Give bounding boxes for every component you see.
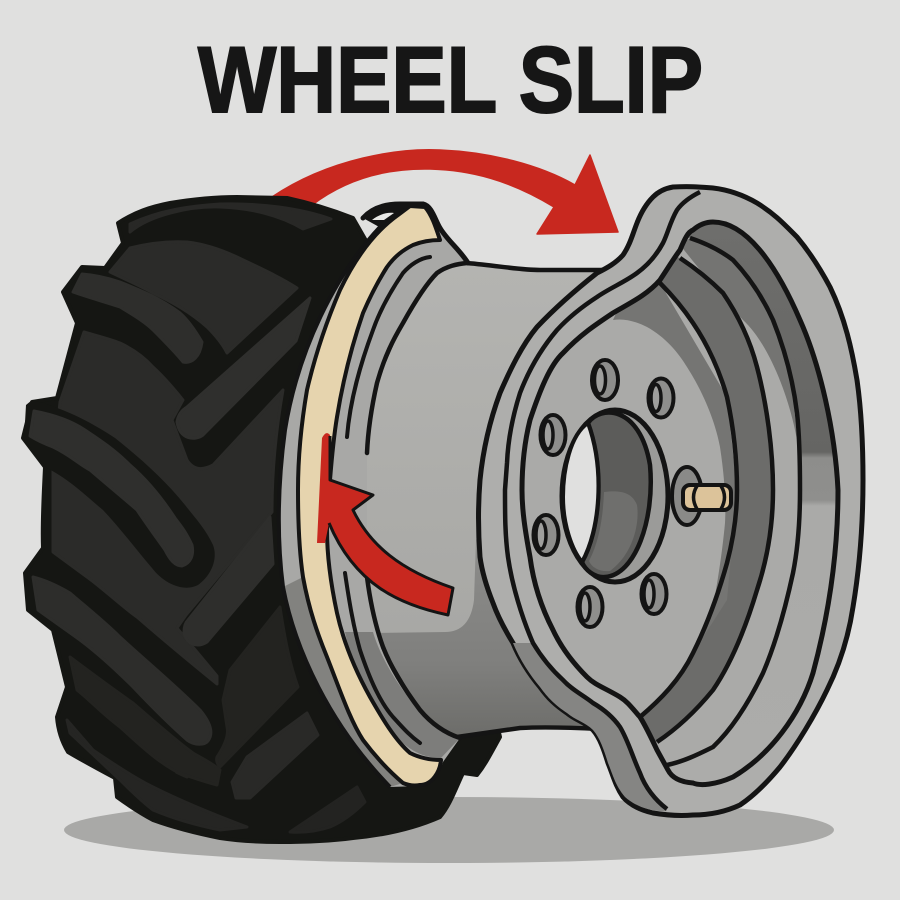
top shoulder lug xyxy=(130,204,331,232)
barrel edge lines xyxy=(367,263,467,738)
upper-left lug xyxy=(73,274,202,362)
outer rim silhouette xyxy=(478,187,863,815)
lower lip shade xyxy=(513,643,667,811)
outer wheel disc xyxy=(478,187,863,815)
well base xyxy=(522,222,838,785)
stud hole 6 xyxy=(642,574,666,614)
upper panel xyxy=(110,242,297,353)
outer band shade xyxy=(283,577,403,787)
sidewall lug xyxy=(232,713,318,798)
bore opening xyxy=(563,423,598,562)
valve base xyxy=(672,467,702,525)
arrow: top rotation xyxy=(272,150,618,234)
tread panels xyxy=(24,204,365,832)
inner lip outline xyxy=(522,222,838,785)
flange top cap xyxy=(363,204,414,228)
stud hole 3 xyxy=(540,415,566,455)
flange sliver highlight xyxy=(372,213,394,220)
disc face xyxy=(524,291,734,714)
tire xyxy=(23,197,500,842)
valve body xyxy=(683,485,731,510)
upper diagonal lug xyxy=(177,298,310,438)
arrow: rim slip xyxy=(317,433,453,615)
flange grooves xyxy=(345,257,430,743)
ring two fill xyxy=(643,257,771,742)
mid-left lug shadow xyxy=(24,400,215,588)
ring one fill xyxy=(678,238,798,504)
cream bead band xyxy=(298,206,441,786)
middle panel xyxy=(53,332,283,684)
mid-left lug xyxy=(30,411,193,566)
center bore xyxy=(562,410,668,582)
bottom tread strip xyxy=(67,720,247,830)
valve stem xyxy=(672,467,731,525)
barrel highlight xyxy=(360,263,625,633)
flange outer outline xyxy=(279,227,390,787)
lower-left lug xyxy=(33,577,211,744)
inner band shade xyxy=(345,632,460,758)
tire silhouette xyxy=(23,197,500,842)
stud holes xyxy=(534,360,674,627)
barrel top and bottom edges xyxy=(457,263,620,737)
bore ring xyxy=(562,410,668,582)
lower sidewall panel xyxy=(217,607,298,767)
barrel shell xyxy=(360,263,640,737)
ring lines xyxy=(640,238,800,765)
lower diagonal lug xyxy=(184,517,273,645)
ring one dark wedge xyxy=(680,238,797,440)
stud hole 1 xyxy=(592,360,618,400)
bore tube lighter floor xyxy=(589,491,638,571)
ground shadow xyxy=(64,797,834,863)
stud hole 4 xyxy=(534,515,558,555)
rim barrel xyxy=(360,263,640,737)
arrow fill xyxy=(317,433,453,615)
lip divider line xyxy=(505,192,700,809)
title: WHEEL SLIP xyxy=(198,27,703,132)
arrow outline xyxy=(329,436,453,615)
stud hole 2 xyxy=(648,378,674,418)
front flange xyxy=(279,204,468,787)
stud hole 5 xyxy=(578,587,602,627)
flange base xyxy=(279,204,467,787)
lower tread panel xyxy=(70,657,220,785)
bottom sidewall block xyxy=(290,787,365,832)
valve details xyxy=(694,486,724,509)
bore tube xyxy=(582,413,651,577)
disc face shadow arc xyxy=(613,283,737,653)
well rings xyxy=(524,236,802,767)
flange top outline xyxy=(363,204,468,263)
